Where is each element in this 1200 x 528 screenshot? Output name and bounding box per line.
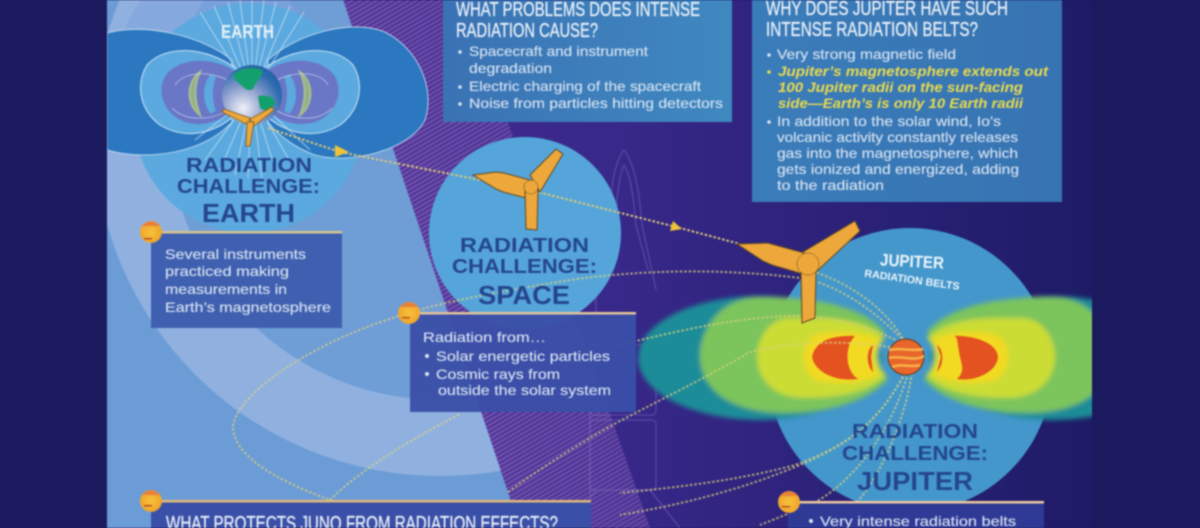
rocket line art [570,150,680,528]
problems list [458,43,723,111]
Jupiter belt label [864,250,960,293]
why list: Jupiter’s magnetosphere extends out [778,63,1049,79]
why list: gets ionized and energized, adding [777,161,1019,177]
panel: Space note [398,302,636,412]
Space heading: CHALLENGE: [452,256,597,278]
Jupiter circle [768,228,1052,512]
why heading [766,0,1008,41]
why list: to the radiation [777,177,884,193]
problems list: Electric charging of the spacecraft [469,78,701,94]
Space note text: Radiation from… [423,329,546,345]
Jupiter heading [842,421,988,496]
problems heading: RADIATION CAUSE? [456,20,598,42]
Space note text: Cosmic rays from [436,366,560,382]
icon: Jupiter marker [778,491,800,513]
radiation challenge space circle [429,137,621,329]
Earth note text: Several instruments [165,246,306,262]
why list: side—Earth’s is only 10 Earth radii [778,95,1024,111]
why list: volcanic activity constantly releases [777,129,1018,145]
icon: Jupiter planet [888,339,924,375]
panel: what problems [443,0,732,122]
Jupiter heading: CHALLENGE: [842,443,988,465]
Earth heading: RADIATION [186,155,312,177]
orbit trajectories [233,270,912,525]
Earth heading: EARTH [202,198,295,228]
flight path Earth to Jupiter [268,128,740,244]
Space heading [452,235,597,310]
earth label: EARTH [221,22,274,42]
problems list: Noise from particles hitting detectors [469,95,723,111]
Earth note text: practiced making [165,263,289,279]
red belt crescents [812,336,998,380]
Earth heading: CHALLENGE: [177,176,320,198]
icon: globe [222,65,282,125]
Earth note text: Earth’s magnetosphere [165,299,331,315]
panel: what protects Juno [140,490,591,528]
earth field circle [134,3,364,233]
Space note text: outside the solar system [438,382,611,398]
why list: In addition to the solar wind, Io’s [777,113,1001,129]
arrow: flight direction near Earth [335,145,349,157]
panel: Jupiter note [778,491,1044,528]
icon: Jupiter marker [140,490,162,512]
why list: Very strong magnetic field [777,46,956,62]
icon: Juno spacecraft at Jupiter [737,221,860,323]
Jupiter heading: RADIATION [852,421,978,443]
Earth heading [177,157,319,223]
icon: small spacecraft at Earth [222,107,274,146]
Space note text: Solar energetic particles [436,348,610,364]
Earth note text [165,246,331,315]
Jupiter belt label: RADIATION BELTS [864,268,960,293]
Space heading: SPACE [478,280,570,310]
arrow: flight direction near Jupiter [670,221,682,231]
why list: 100 Jupiter radii on the sun-facing [778,79,1023,95]
why heading: INTENSE RADIATION BELTS? [766,19,978,41]
Jupiter heading: JUPITER [857,466,973,496]
panel: why Jupiter [752,0,1062,202]
Jupiter belt label: JUPITER [880,250,944,273]
why list [767,46,1049,193]
panel: radiation challenge Earth diagram [107,0,428,233]
problems heading [456,0,700,42]
Earth note text: measurements in [165,281,287,297]
Space heading: RADIATION [460,235,589,257]
icon: Jupiter marker [398,302,420,324]
panel: Earth note [140,221,342,328]
magnetosphere lobes [107,0,428,178]
problems list: degradation [469,60,552,76]
problems list: Spacecraft and instrument [469,43,648,59]
icon: spacecraft in space [473,149,563,230]
icon: Jupiter marker [140,221,162,243]
Space note text [423,329,611,398]
why list: gas into the magnetosphere, which [777,145,1018,161]
radiation belts diagram [638,296,1174,420]
